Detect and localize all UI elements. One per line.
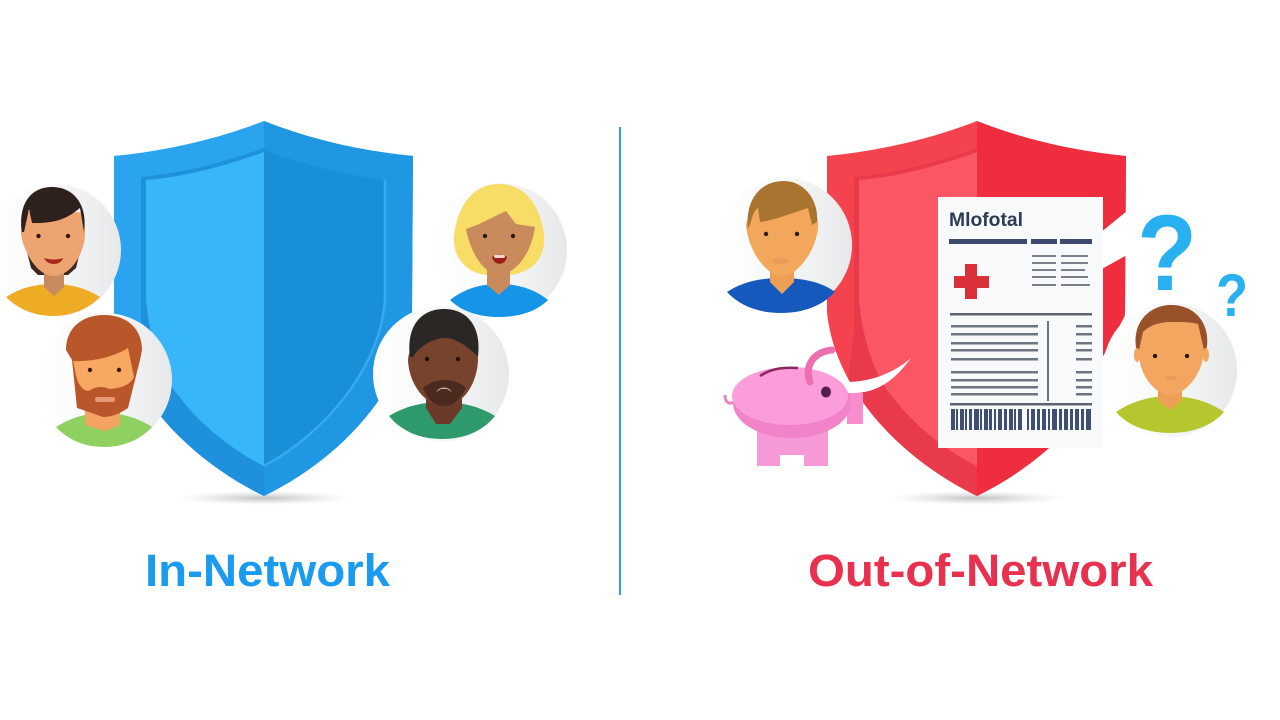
person: man with blue shirt [718,178,852,313]
icon: small question mark: ? [1216,262,1248,329]
document title: Mlofotal [949,210,1023,231]
blue shield [114,121,413,500]
panel: out-of-network [718,121,1248,596]
divider line [619,127,621,595]
label: in-network: In-Network [145,545,391,596]
white gap on shield beside document [1100,211,1127,270]
shield shadow [176,491,352,505]
red shield [827,121,1126,500]
person: confused man with green shirt [1103,303,1237,437]
header bars [949,239,1092,244]
person: blonde woman [433,183,567,317]
person: man with red beard [38,313,172,447]
white wedge beside piggy bank [847,358,911,393]
person: man with dark skin [373,306,509,442]
icon: large question mark: ? [1137,192,1197,313]
detail lines [1032,255,1090,286]
label: out-of-network: Out-of-Network [808,545,1154,596]
medical bill document [938,197,1103,448]
shield shadow [889,491,1065,505]
person: woman with dark hair [0,184,121,316]
panel: in-network [0,121,567,596]
barcode [951,409,1091,430]
icon: red cross [954,264,989,299]
infographic canvas [6,121,1245,595]
icon: piggy bank [725,350,863,466]
table [950,313,1092,406]
white cut on shield beside lower person [1100,312,1127,400]
